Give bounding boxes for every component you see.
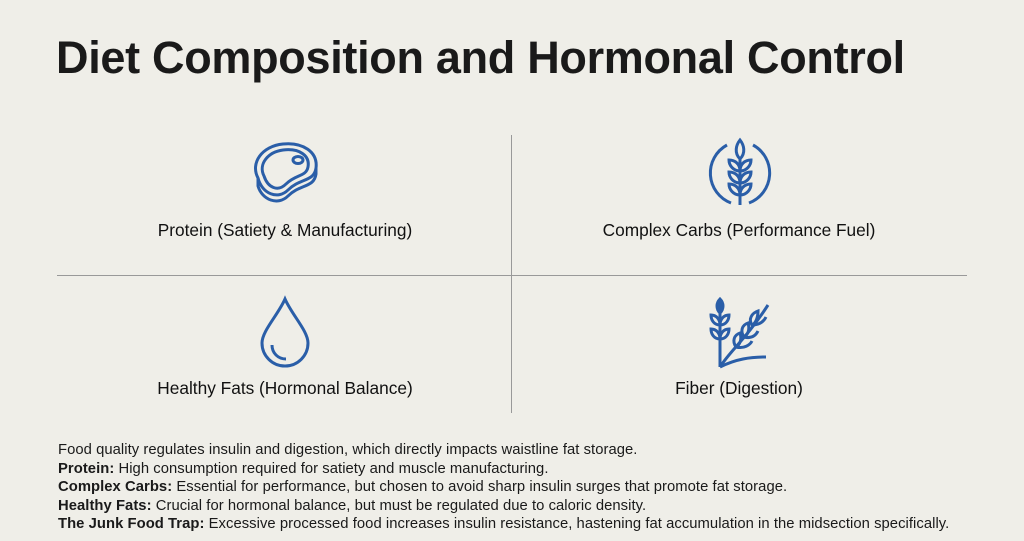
- icon: drop: [260, 295, 310, 368]
- label: carbs: Complex Carbs (Performance Fuel): [603, 220, 875, 240]
- label: protein: Protein (Satiety & Manufacturing): [158, 220, 412, 240]
- icon: fiber wheat: [710, 297, 770, 368]
- footer text: Complex Carbs: Essential for performance, but chosen to avoid sharp insulin surges that promote fat storage.: [58, 479, 787, 495]
- footer text: [58, 442, 949, 532]
- title: Diet Composition and Hormonal Control: [56, 32, 905, 83]
- footer text: Healthy Fats: Crucial for hormonal balance, but must be regulated due to caloric density.: [58, 498, 646, 514]
- label: fiber: Fiber (Digestion): [675, 378, 803, 398]
- footer text: Food quality regulates insulin and digestion, which directly impacts waistline fat storage.: [58, 442, 637, 458]
- footer text: Protein: High consumption required for satiety and muscle manufacturing.: [58, 461, 548, 477]
- icon: steak: [254, 142, 318, 202]
- label: fats: Healthy Fats (Hormonal Balance): [157, 378, 413, 398]
- footer text: The Junk Food Trap: Excessive processed food increases insulin resistance, hastening fat accumulation in the midsection specifically.: [58, 516, 949, 532]
- icon: wheat in circle: [708, 138, 772, 205]
